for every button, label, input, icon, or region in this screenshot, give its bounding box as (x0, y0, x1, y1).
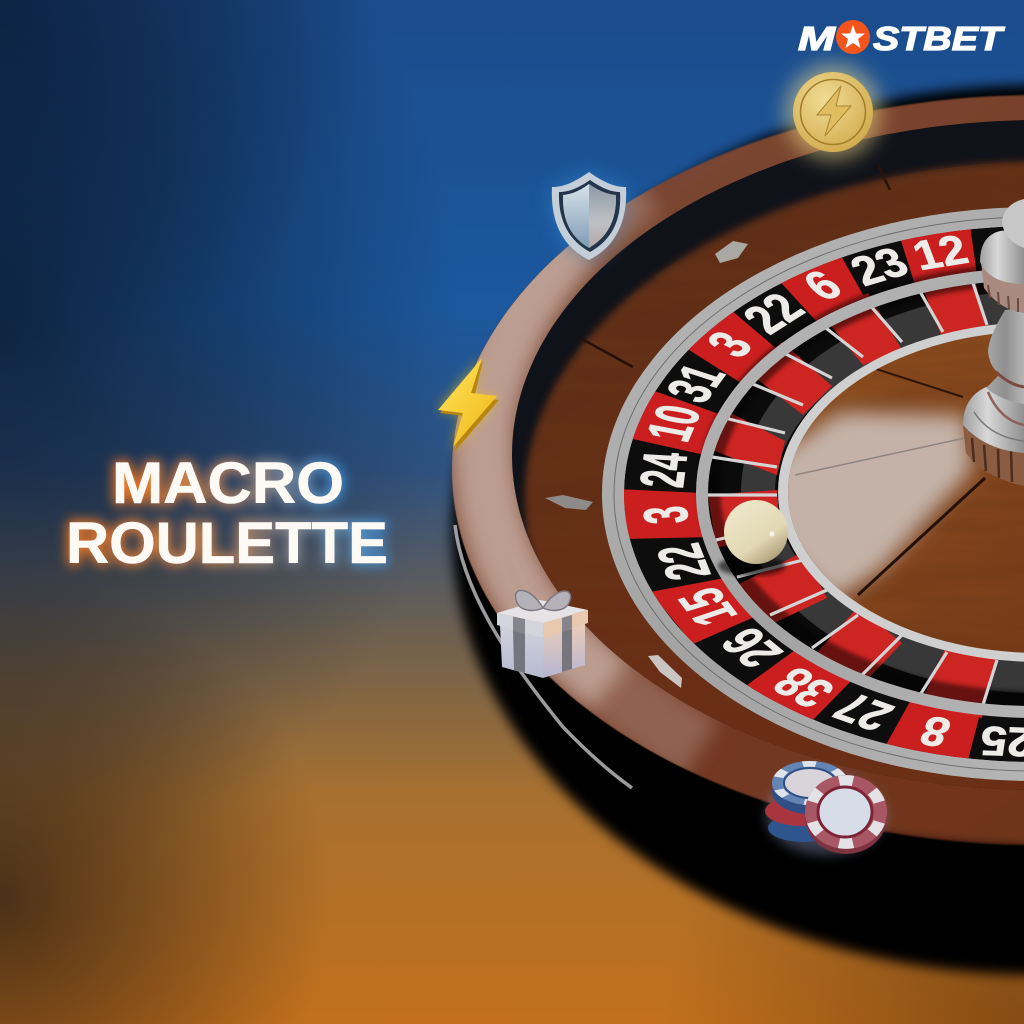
logo: MOSTBET (798, 20, 1005, 57)
outer chrome track (602, 207, 1024, 781)
number labels: 15 (665, 581, 751, 633)
ball (718, 500, 788, 576)
number labels: 38 (761, 659, 846, 717)
icon: casino chips (765, 761, 887, 855)
back chip stack (765, 761, 848, 842)
number labels: 22 (645, 539, 725, 584)
wooden bowl (505, 115, 1024, 835)
number labels: 3 (632, 504, 702, 526)
wooden rim (452, 95, 1024, 850)
number labels: 8 (914, 707, 957, 755)
red pockets (708, 270, 997, 718)
disc reflection (770, 412, 972, 600)
number labels: 24 (629, 450, 701, 489)
logo: MOSTBET: STBET (873, 20, 1005, 57)
pocket frets (708, 283, 997, 708)
title (66, 451, 388, 576)
logo: MOSTBET: M (798, 20, 837, 57)
wheel base and shadow (452, 85, 1024, 975)
number ring (617, 218, 1024, 768)
number labels: 23 (841, 238, 917, 295)
number labels: 27 (824, 683, 903, 740)
number labels: 31 (654, 358, 739, 409)
number labels (629, 227, 1024, 765)
title: ROULETTE (66, 511, 388, 576)
number labels: 26 (709, 619, 796, 675)
icon: gift box (497, 590, 588, 678)
roulette wheel (452, 85, 1024, 975)
icon: shield (552, 172, 626, 260)
studs on bowl (545, 241, 748, 688)
title: MACRO (112, 451, 344, 516)
icon: lightning bolt (438, 358, 499, 452)
pockets (700, 270, 1024, 718)
number labels: 10 (634, 400, 715, 446)
red number segments (617, 218, 982, 768)
number labels: 3 (695, 324, 766, 365)
front chip (805, 775, 887, 854)
number labels: 6 (792, 262, 853, 309)
center spindle (963, 199, 1024, 486)
number labels: 22 (731, 285, 816, 342)
logo star badge (836, 20, 870, 54)
title: MACRO (112, 451, 344, 516)
number labels: 12 (907, 227, 974, 279)
middle chrome ring (702, 274, 1024, 712)
title: ROULETTE (66, 511, 388, 576)
icon: gold coin with lightning (785, 64, 881, 160)
center wooden disc (770, 322, 1024, 662)
